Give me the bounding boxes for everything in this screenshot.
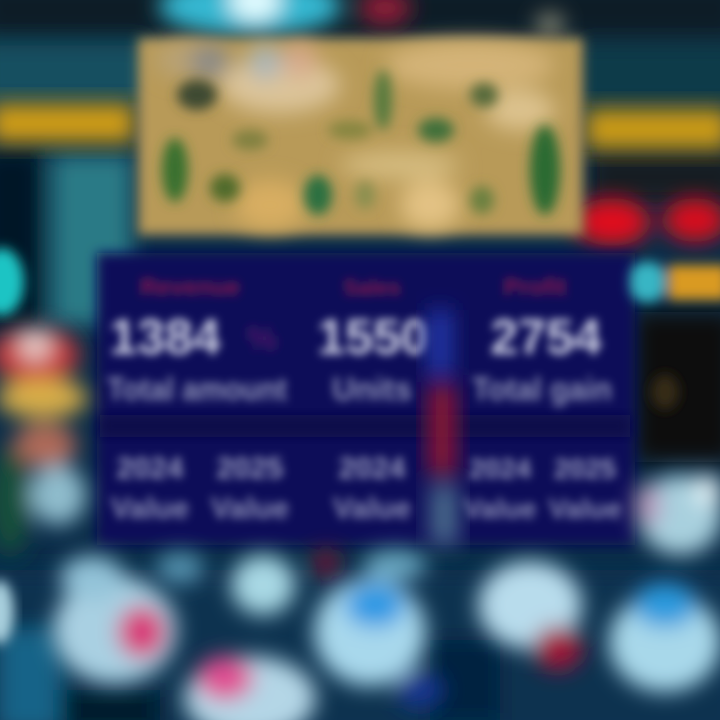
- yellow beam right: [585, 108, 720, 150]
- column one stats: Revenue: [140, 274, 240, 301]
- column one stats: 2024: [117, 452, 184, 485]
- right cluster of spheres: [635, 474, 720, 555]
- column three stats: Total gain: [472, 371, 612, 407]
- left-edge sphere: [0, 580, 14, 644]
- column two stats: [317, 275, 429, 525]
- sphere 5: [478, 561, 582, 670]
- sphere 1: [53, 556, 177, 684]
- column one stats: 1384: [109, 309, 221, 365]
- sphere 4: [314, 550, 444, 708]
- column one stats: Value: [111, 492, 189, 525]
- right tag: [630, 262, 720, 410]
- column divider accent: [428, 310, 458, 545]
- sphere 2: [156, 549, 340, 615]
- sphere 3: [184, 656, 316, 720]
- sphere 6: [609, 583, 720, 692]
- column one stats: [107, 274, 289, 525]
- column three stats: 2025: [554, 453, 616, 484]
- panel: navy statistics: [97, 253, 635, 545]
- column one stats: %: [247, 320, 277, 358]
- column one stats: 2025: [217, 452, 283, 485]
- column three stats: Value: [548, 493, 622, 524]
- column two stats: Value: [333, 492, 411, 525]
- column two stats: 1550: [317, 309, 429, 365]
- column two stats: Units: [332, 371, 412, 407]
- red sign at right: [574, 198, 720, 246]
- ceiling light: [158, 0, 564, 37]
- column three stats: 2754: [490, 309, 602, 365]
- column three stats: Value: [463, 493, 537, 524]
- column three stats: Profit: [504, 274, 566, 301]
- panel: gold poster: [138, 38, 583, 235]
- left cyan orb: [0, 248, 24, 316]
- column two stats: 2024: [339, 452, 406, 485]
- column three stats: 2024: [469, 453, 532, 484]
- column one stats: Value: [211, 492, 289, 525]
- spheres along bottom: [0, 549, 720, 720]
- yellow beam left: [0, 103, 135, 143]
- column one stats: Total amount: [107, 371, 287, 407]
- poster plant icons: [162, 70, 560, 215]
- column two stats: Sales: [343, 275, 401, 300]
- column three stats: [463, 274, 622, 524]
- left colourful figure: [0, 327, 88, 555]
